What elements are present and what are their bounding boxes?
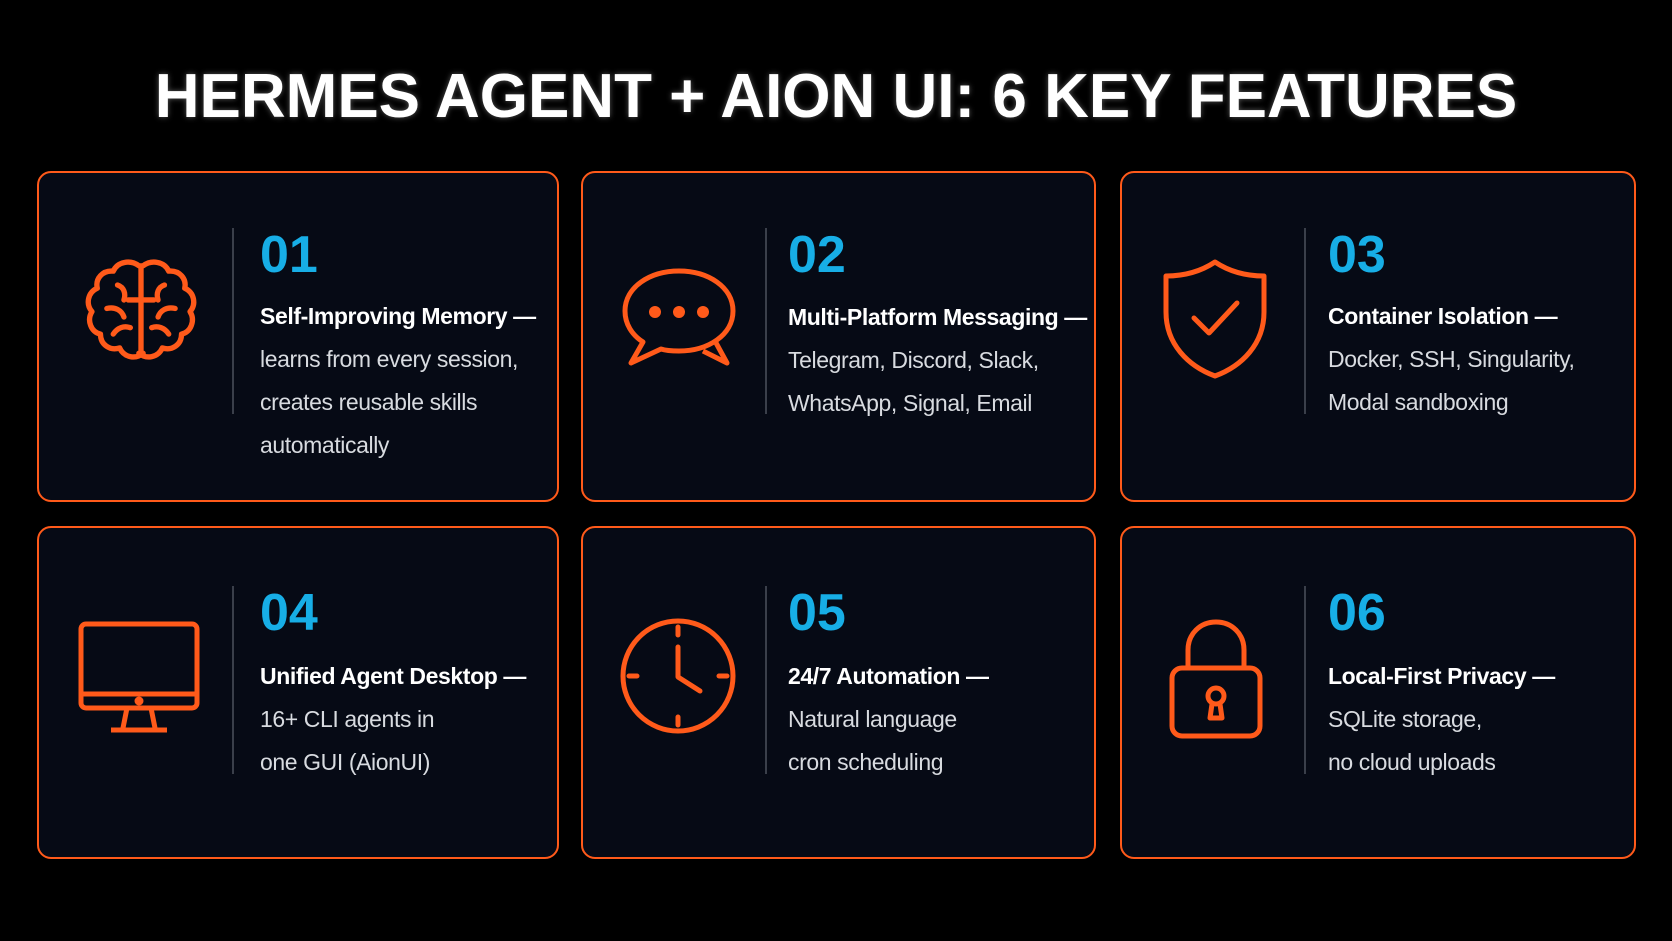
text: one GUI (AionUI) — [260, 749, 430, 775]
title: HERMES AGENT + AION UI: 6 KEY FEATURES — [155, 62, 1517, 131]
text: 24/7 Automation — — [788, 663, 989, 689]
text: learns from every session, — [260, 346, 518, 372]
text: WhatsApp, Signal, Email — [788, 390, 1032, 416]
text: Local-First Privacy — — [1328, 663, 1555, 689]
panel: 04 unified agent desktop — [37, 526, 559, 859]
text — [788, 663, 989, 775]
icon: monitor — [78, 622, 200, 732]
icon: brain — [86, 259, 196, 360]
icon: chat bubble — [622, 268, 736, 366]
text: no cloud uploads — [1328, 749, 1496, 775]
number: 02 — [788, 226, 846, 284]
text: Container Isolation — — [1328, 303, 1557, 329]
text — [260, 663, 526, 775]
text: automatically — [260, 432, 389, 458]
text: Multi-Platform Messaging — — [788, 304, 1087, 330]
panel: 02 multi-platform messaging — [581, 171, 1096, 502]
number: 05 — [788, 584, 846, 642]
number: 01 — [260, 226, 318, 284]
number: 06 — [1328, 584, 1386, 642]
panel: 03 container isolation — [1120, 171, 1636, 502]
text — [788, 304, 1088, 416]
text: creates reusable skills — [260, 389, 477, 415]
text: SQLite storage, — [1328, 706, 1482, 732]
number: 04 — [260, 584, 318, 642]
panel: 05 24/7 automation — [581, 526, 1096, 859]
text: Docker, SSH, Singularity, — [1328, 346, 1575, 372]
number: 03 — [1328, 226, 1386, 284]
panel: 06 local-first privacy — [1120, 526, 1636, 859]
text: 16+ CLI agents in — [260, 706, 434, 732]
text — [1328, 663, 1556, 775]
text: Unified Agent Desktop — — [260, 663, 526, 689]
text — [260, 303, 536, 458]
icon: padlock — [1170, 620, 1262, 738]
text: Modal sandboxing — [1328, 389, 1508, 415]
text: Self-Improving Memory — — [260, 303, 536, 329]
text: Natural language — [788, 706, 957, 732]
icon: clock — [620, 618, 736, 734]
panel: 01 self-improving memory — [37, 171, 559, 502]
text: cron scheduling — [788, 749, 943, 775]
icon: shield check — [1164, 260, 1266, 378]
text — [1328, 303, 1575, 415]
text: Telegram, Discord, Slack, — [788, 347, 1039, 373]
